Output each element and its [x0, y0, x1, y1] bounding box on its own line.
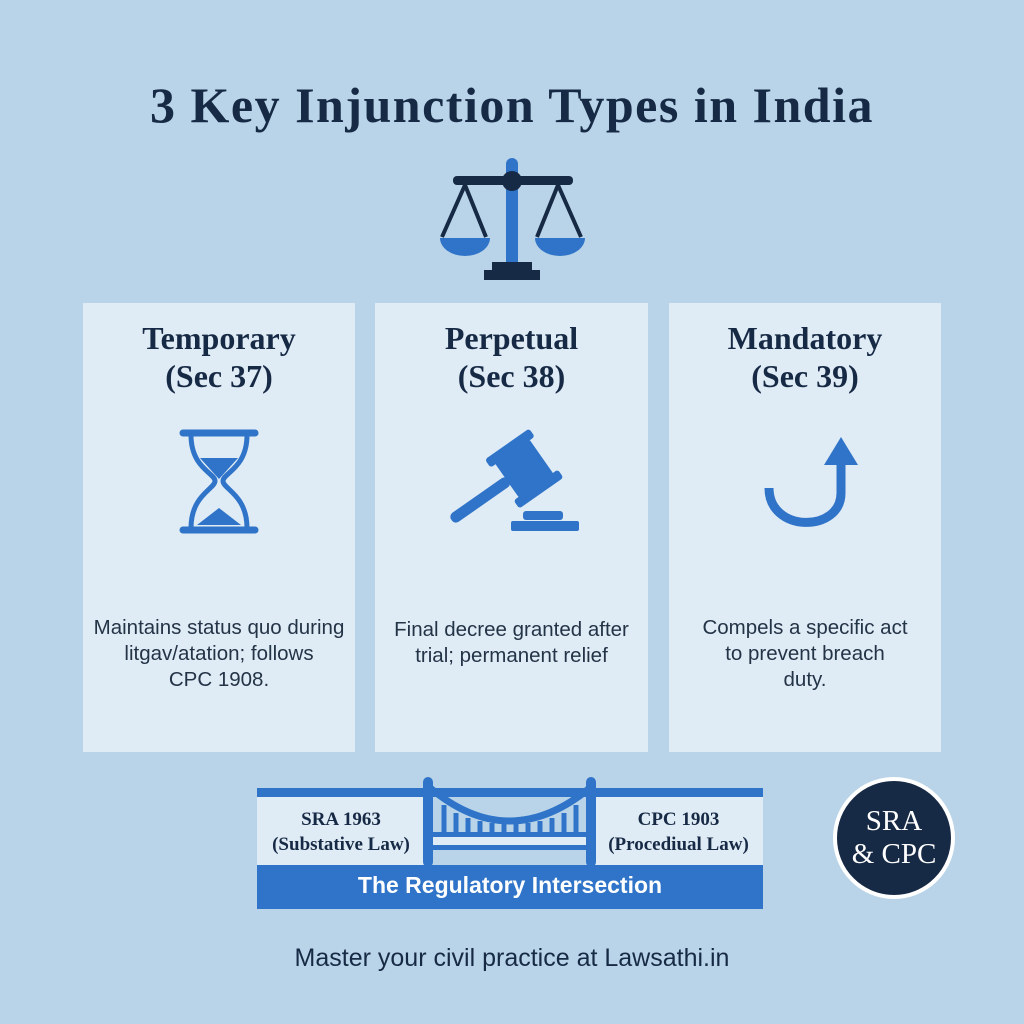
heading: Mandatory	[728, 320, 882, 356]
description: Compels a specific act	[702, 616, 908, 639]
badge: SRA & CPC	[833, 777, 955, 899]
icon: hourglass	[180, 430, 258, 534]
heading	[142, 320, 296, 394]
panel: temporary	[83, 303, 355, 752]
left label: (Substative Law)	[272, 834, 410, 855]
footer: Master your civil practice at Lawsathi.in	[295, 944, 729, 972]
left label	[272, 809, 410, 855]
description: CPC 1908.	[169, 668, 269, 691]
heading	[728, 320, 882, 394]
description	[702, 616, 908, 691]
description: Final decree granted after	[394, 618, 629, 641]
badge: SRA & CPC: SRA	[866, 805, 922, 837]
description: duty.	[784, 668, 826, 691]
description: trial; permanent relief	[415, 644, 608, 667]
description: to prevent breach	[725, 642, 885, 665]
panel: perpetual	[375, 303, 648, 752]
description	[94, 616, 344, 691]
band text: The Regulatory Intersection	[358, 872, 662, 898]
heading: (Sec 38)	[458, 358, 565, 394]
panel: mandatory	[669, 303, 941, 752]
heading	[445, 320, 578, 394]
icon: curved arrow	[764, 437, 858, 527]
left label: SRA 1963	[301, 809, 381, 830]
icon: scales of justice	[440, 158, 585, 280]
heading: Perpetual	[445, 320, 578, 356]
description: litgav/atation; follows	[124, 642, 314, 665]
description: Maintains status quo during	[94, 616, 344, 639]
icon: gavel	[450, 430, 579, 531]
title: 3 Key Injunction Types in India	[150, 77, 874, 133]
bridge banner	[257, 777, 763, 909]
heading: Temporary	[142, 320, 296, 356]
right label: (Procediual Law)	[608, 834, 749, 855]
badge: SRA & CPC: & CPC	[852, 838, 936, 870]
heading: (Sec 37)	[165, 358, 273, 394]
right label	[608, 809, 749, 855]
right label: CPC 1903	[638, 809, 719, 830]
heading: (Sec 39)	[751, 358, 859, 394]
description	[394, 618, 629, 667]
